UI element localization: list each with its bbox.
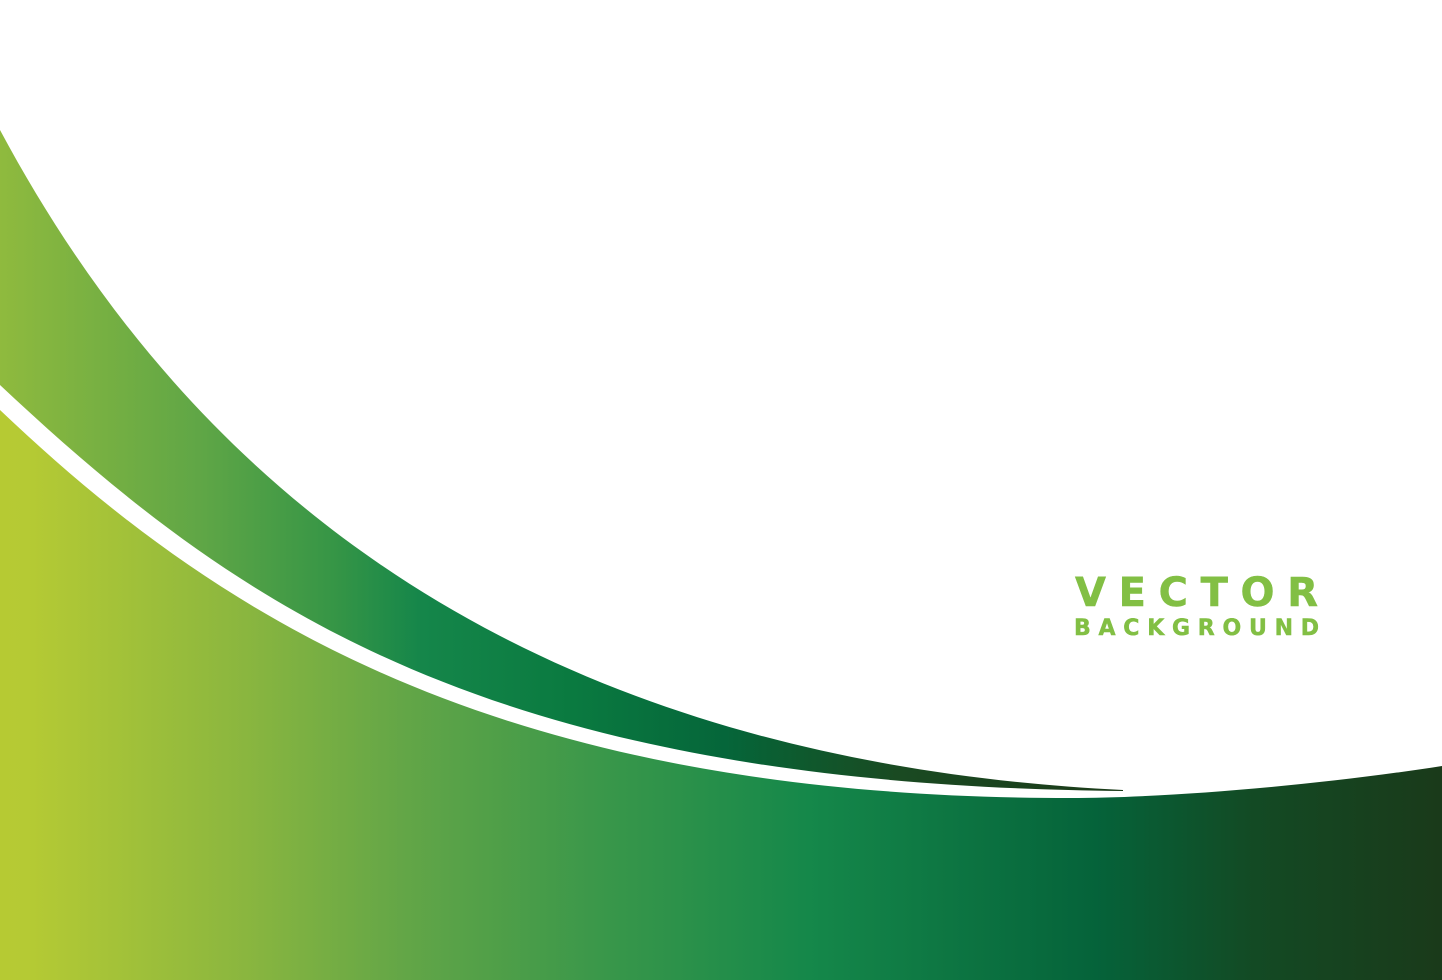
subheading: BACKGROUND: BACKGROUND: [1074, 616, 1319, 641]
text: vector background: [1074, 570, 1319, 641]
upper green swoosh: [0, 130, 1123, 791]
heading: VECTOR: VECTOR: [1075, 570, 1318, 616]
lower green wave: [0, 410, 1442, 980]
